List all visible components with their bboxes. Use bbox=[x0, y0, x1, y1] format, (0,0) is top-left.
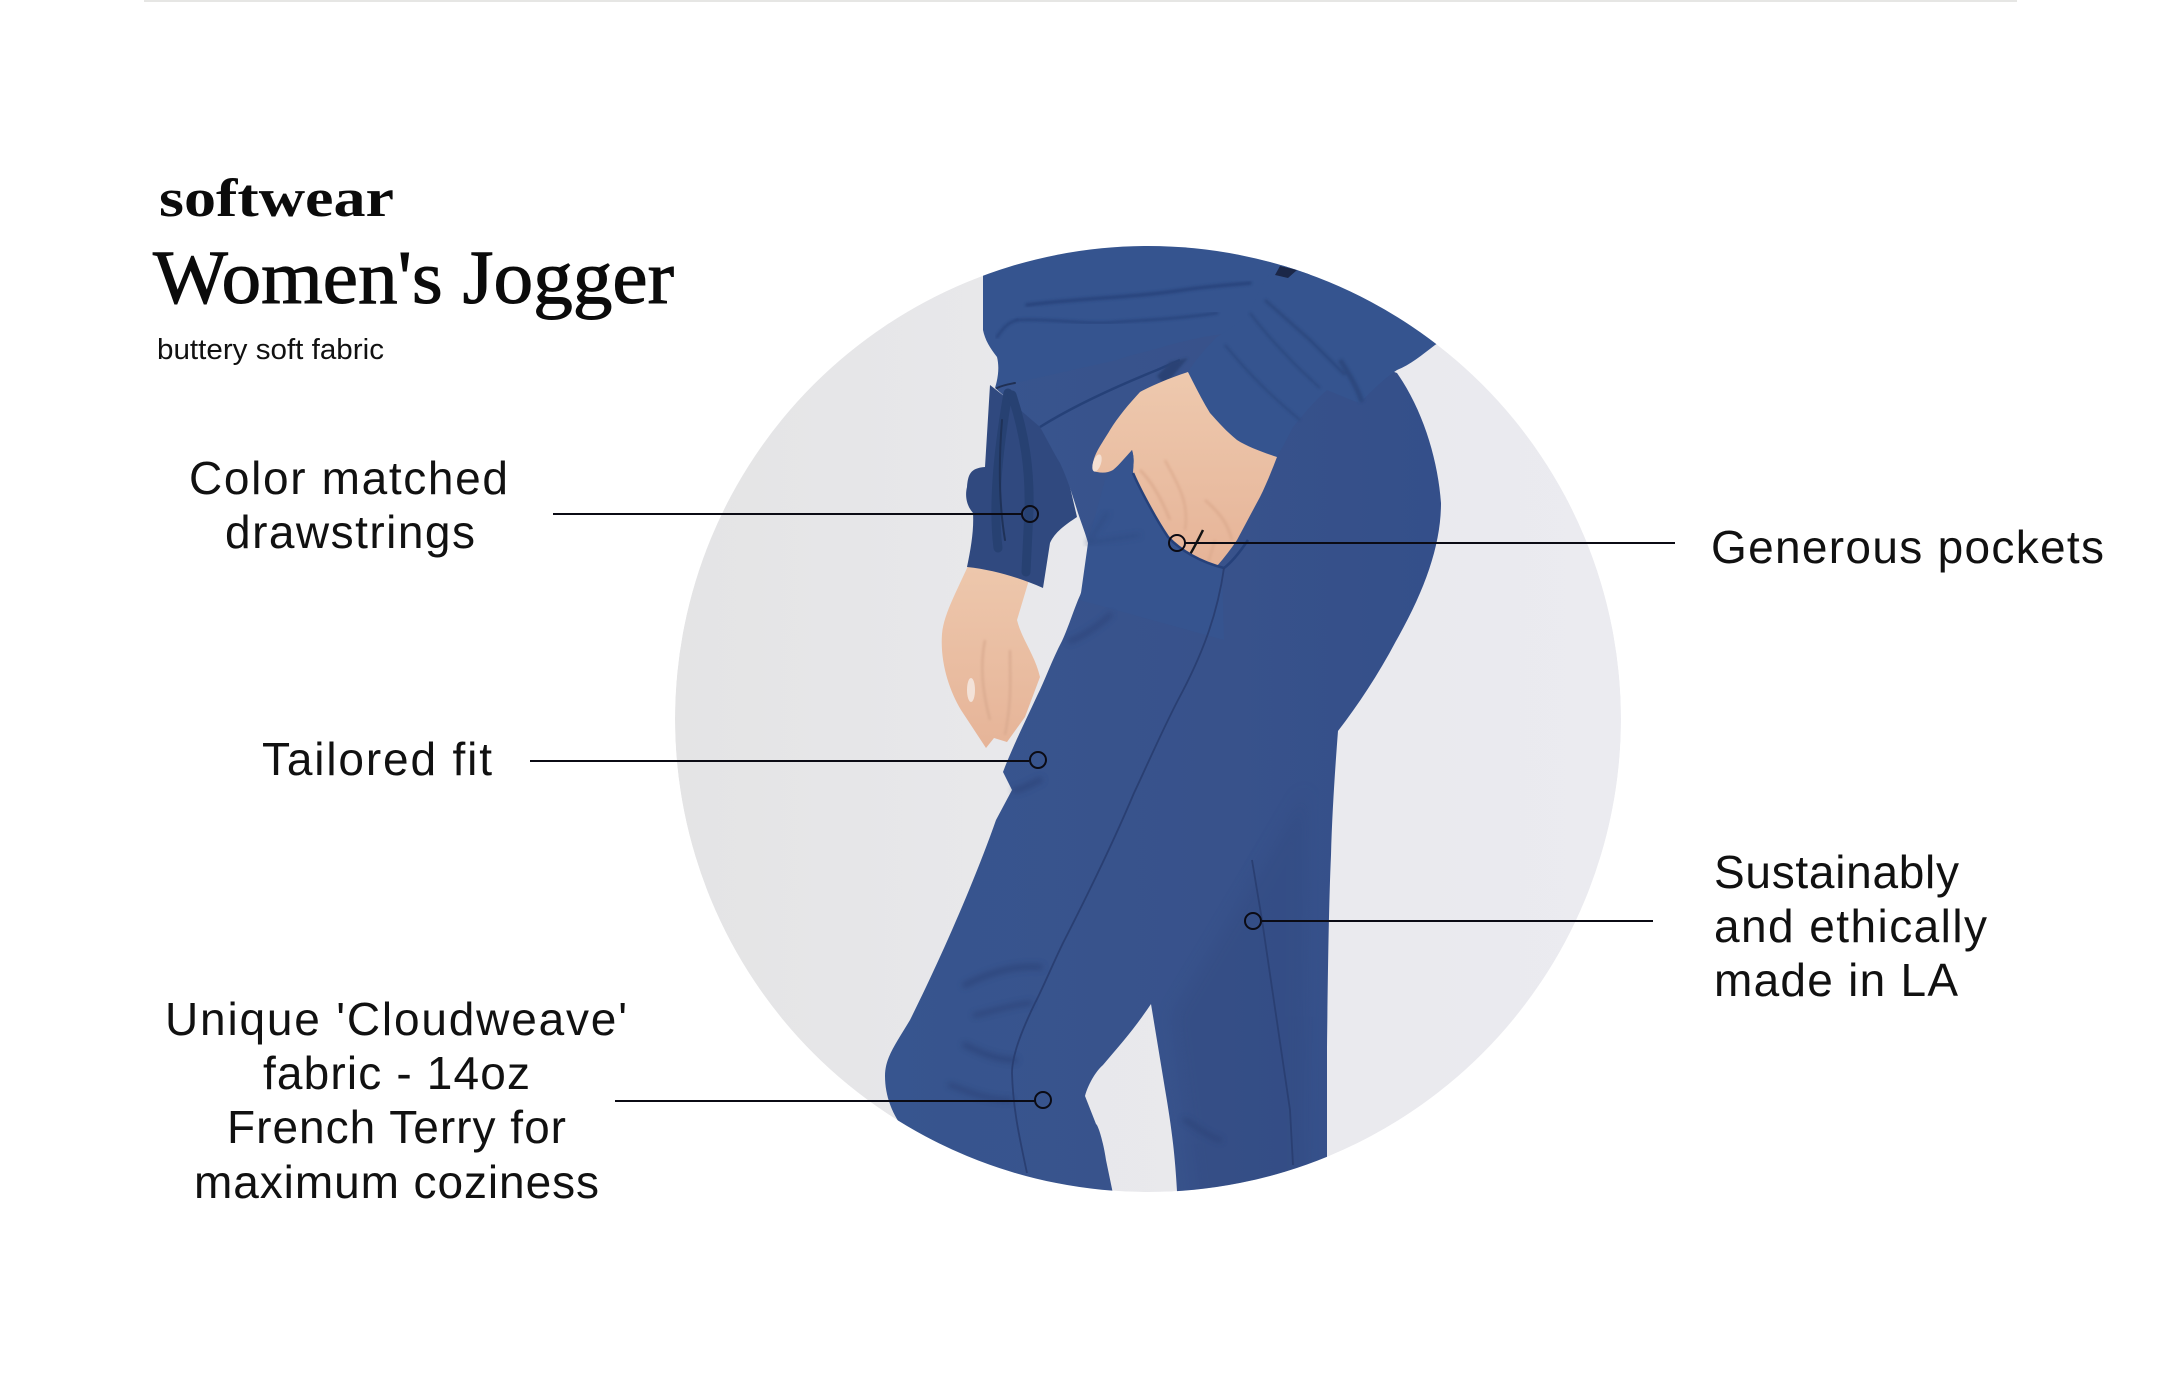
thumb nail bbox=[1092, 454, 1102, 472]
product photo circle bbox=[675, 240, 1621, 1213]
pant seams bbox=[1012, 568, 1293, 1173]
label: color matched drawstrings: Color matched bbox=[189, 452, 508, 504]
callout: generous pockets bbox=[1169, 521, 2104, 573]
fingernail bbox=[967, 678, 975, 702]
label: color matched drawstrings: drawstrings bbox=[225, 506, 475, 558]
top divider bbox=[144, 0, 2017, 2]
label: sustainably made: and ethically bbox=[1714, 900, 1987, 952]
label: color matched drawstrings bbox=[189, 452, 508, 558]
hand in pocket bbox=[1093, 372, 1277, 566]
leader line: drawstrings bbox=[553, 506, 1038, 522]
hand shading bbox=[1140, 460, 1232, 538]
title: Women's Jogger bbox=[153, 236, 674, 320]
pocket edge bbox=[1133, 473, 1248, 568]
brand name: softwear bbox=[159, 168, 394, 228]
pocket shadow crease bbox=[1083, 536, 1088, 546]
label: sustainably made: Sustainably bbox=[1714, 846, 1959, 898]
sweater fold shadows bbox=[997, 283, 1250, 388]
pant wrinkles bbox=[950, 616, 1109, 1100]
ring bbox=[1189, 530, 1203, 556]
callout: tailored fit bbox=[262, 733, 1046, 785]
pocket flap bbox=[1080, 450, 1211, 594]
callout: drawstrings bbox=[189, 452, 1038, 558]
forearm sleeve bbox=[1188, 265, 1436, 457]
label: generous pockets: Generous pockets bbox=[1711, 521, 2104, 573]
lower hand details bbox=[982, 640, 1010, 735]
callout: sustainably made bbox=[1245, 846, 1987, 1006]
sleeve gathers bbox=[1225, 300, 1362, 420]
circle background bbox=[675, 246, 1621, 1192]
lower hand bbox=[942, 550, 1040, 748]
leader line: sustainably made bbox=[1245, 913, 1653, 929]
label: cloudweave fabric: French Terry for bbox=[227, 1101, 566, 1153]
label: cloudweave fabric: maximum coziness bbox=[194, 1156, 599, 1208]
drawstrings bbox=[996, 393, 1029, 572]
label: cloudweave fabric bbox=[165, 993, 627, 1208]
label: cloudweave fabric: fabric - 14oz bbox=[263, 1047, 530, 1099]
collar dark spot bbox=[1275, 266, 1297, 278]
leader line: tailored fit bbox=[530, 752, 1046, 768]
rear leg shadow bbox=[1198, 1166, 1302, 1190]
callout: cloudweave fabric bbox=[165, 993, 1051, 1208]
label: sustainably made bbox=[1714, 846, 1987, 1006]
waistband shadow bbox=[1158, 358, 1186, 382]
back sleeve and cuff bbox=[966, 385, 1077, 588]
infographic canvas bbox=[144, 0, 2102, 1198]
leader line: generous pockets bbox=[1169, 535, 1675, 551]
pants bbox=[885, 320, 1441, 1213]
label: cloudweave fabric: Unique 'Cloudweave' bbox=[165, 993, 627, 1045]
waistband seam bbox=[1040, 360, 1180, 427]
leader line: cloudweave fabric bbox=[615, 1092, 1051, 1108]
label: tailored fit: Tailored fit bbox=[262, 733, 492, 785]
sweater body bbox=[983, 240, 1310, 388]
label: sustainably made: made in LA bbox=[1714, 954, 1958, 1006]
subtitle: buttery soft fabric bbox=[157, 334, 384, 366]
